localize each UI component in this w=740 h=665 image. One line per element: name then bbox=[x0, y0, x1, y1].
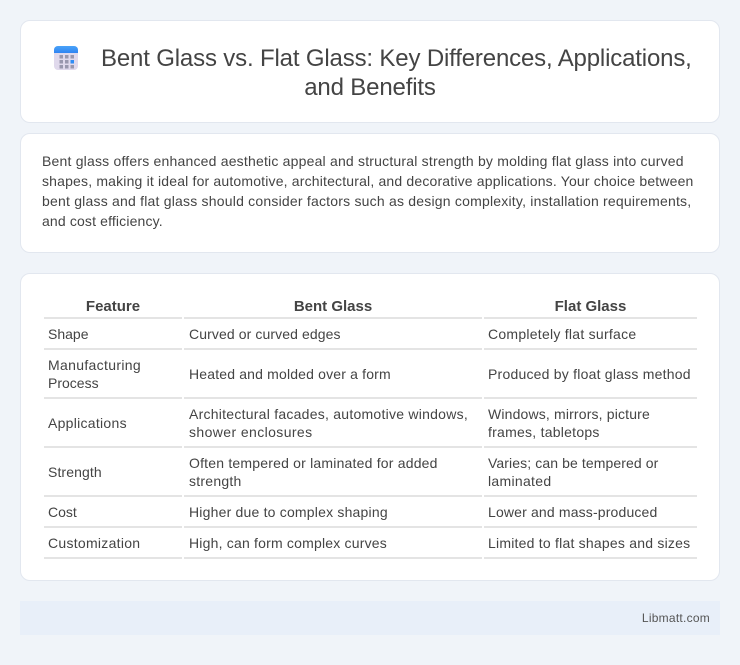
row: shape: Curved or curved edges bbox=[189, 326, 341, 342]
row: applications: Architectural facades, automotive windows, bbox=[189, 406, 468, 422]
intro text bbox=[42, 153, 694, 229]
panel: comparison table bbox=[20, 273, 720, 581]
row: shape: Completely flat surface bbox=[488, 326, 636, 342]
row: strength: Often tempered or laminated for added bbox=[189, 455, 438, 471]
intro text: bent glass and flat glass should consider factors such as design complexity, installation requirements, bbox=[42, 193, 691, 209]
panel: introduction bbox=[20, 133, 720, 253]
title bbox=[101, 45, 692, 101]
row: applications: Applications bbox=[48, 415, 127, 431]
footer: Libmatt.com bbox=[642, 611, 710, 625]
footer bbox=[20, 601, 720, 635]
row: manufacturing process: Manufacturing bbox=[48, 357, 141, 373]
row: cost bbox=[48, 504, 657, 520]
table header: Bent Glass bbox=[294, 298, 372, 315]
row: customization bbox=[48, 535, 690, 551]
row: manufacturing process: Heated and molded over a form bbox=[189, 366, 391, 382]
row: manufacturing process bbox=[48, 357, 691, 391]
table header: Flat Glass bbox=[555, 298, 626, 315]
icon: calendar bbox=[54, 46, 78, 70]
row: shape: Shape bbox=[48, 326, 88, 342]
row: strength: laminated bbox=[488, 473, 551, 489]
row: customization: Limited to flat shapes and sizes bbox=[488, 535, 690, 551]
title: and Benefits bbox=[304, 74, 436, 101]
row: strength: strength bbox=[189, 473, 242, 489]
row: applications: Windows, mirrors, picture bbox=[488, 406, 650, 422]
panel: title card bbox=[20, 20, 720, 123]
row: customization: Customization bbox=[48, 535, 140, 551]
row: manufacturing process: Produced by float glass method bbox=[488, 366, 691, 382]
intro text: shapes, making it ideal for automotive, architectural, and decorative applications. Your choice between bbox=[42, 173, 694, 189]
row: applications bbox=[48, 406, 650, 440]
table header bbox=[86, 298, 626, 315]
title: Bent Glass vs. Flat Glass: Key Differences, Applications, bbox=[101, 45, 692, 72]
table header: Feature bbox=[86, 298, 140, 315]
row: cost: Lower and mass-produced bbox=[488, 504, 657, 520]
row: cost: Cost bbox=[48, 504, 77, 520]
intro text: and cost efficiency. bbox=[42, 213, 163, 229]
row: manufacturing process: Process bbox=[48, 375, 99, 391]
row: customization: High, can form complex curves bbox=[189, 535, 387, 551]
intro text: Bent glass offers enhanced aesthetic appeal and structural strength by molding flat glass into curved bbox=[42, 153, 684, 169]
row: strength: Strength bbox=[48, 464, 102, 480]
row: applications: shower enclosures bbox=[189, 424, 313, 440]
row: applications: frames, tabletops bbox=[488, 424, 600, 440]
row: strength bbox=[48, 455, 658, 489]
row: cost: Higher due to complex shaping bbox=[189, 504, 388, 520]
row: shape bbox=[48, 326, 636, 342]
row: strength: Varies; can be tempered or bbox=[488, 455, 658, 471]
